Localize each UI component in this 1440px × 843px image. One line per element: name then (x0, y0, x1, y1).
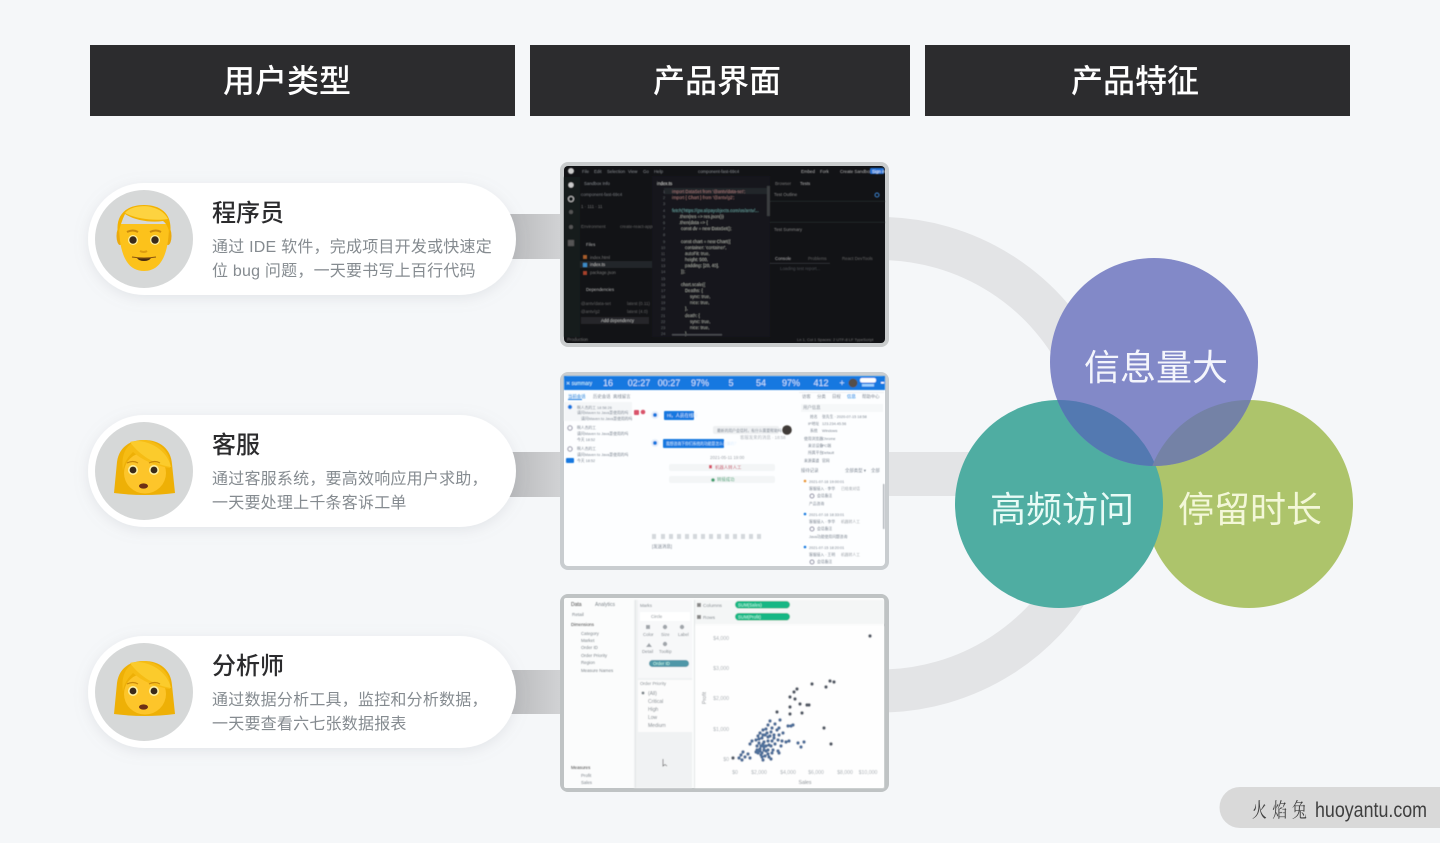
screenshot: customer service console: 帮助中心 (862, 393, 880, 400)
screenshot: data analysis scatter plot: Low (648, 715, 658, 721)
screenshot: customer service console: 会话备注 (817, 526, 832, 531)
screenshot: code editor: 18 (661, 295, 665, 299)
screenshot: customer service console: 16 (603, 378, 613, 388)
header: product interface (530, 45, 910, 116)
screenshot: data analysis scatter plot: Data (571, 602, 582, 608)
screenshot: customer service console: 会话备注 (817, 559, 832, 564)
pill: customer service (88, 415, 516, 527)
title: analyst: 分析师 (212, 653, 284, 680)
screenshot: customer service console: 官网 (822, 458, 830, 463)
screenshot: code editor: index.html (590, 255, 610, 260)
screenshot: code editor: nice: true, (690, 300, 709, 305)
screenshot: customer service console: 啊人杰的工 18:58:26 (577, 405, 612, 410)
screenshot: customer service console: 会话备注 (817, 493, 832, 498)
screenshot: customer service console: 系统 (810, 428, 818, 433)
screenshot: code editor: 16 (661, 283, 665, 287)
avatar: customer service (95, 422, 193, 520)
screenshot: customer service console: Java功能使用问题咨询 (809, 534, 848, 539)
screenshot: code editor: Selection (607, 169, 626, 174)
screenshot: code editor: 15 (661, 277, 665, 281)
screenshot: customer service console: 今天 18:52 (577, 458, 595, 463)
screenshot: data analysis scatter plot: Color (643, 632, 654, 637)
screenshot: data analysis scatter plot: Order Priority (640, 681, 667, 686)
header: product interface: 产品界面 (653, 63, 781, 99)
screenshot: data analysis scatter plot: $10,000 (859, 770, 877, 776)
header: user type: 用户类型 (223, 63, 351, 99)
avatar: analyst (95, 643, 193, 741)
screenshot: code editor: 20 (661, 307, 665, 311)
screenshot: data analysis scatter plot: Measure Names (581, 668, 614, 673)
screenshot: code editor: height: 500, (685, 257, 708, 262)
screenshot: code editor: Deaths: { (685, 288, 703, 293)
screenshot: customer service console: 54 (756, 378, 766, 388)
screenshot: data analysis scatter plot: Detail (642, 649, 653, 654)
screenshot: code editor: Problems (808, 256, 827, 261)
screenshot: data analysis scatter plot: Market (581, 638, 595, 643)
circle: long dwell time (1145, 400, 1353, 608)
screenshot: code editor (560, 162, 889, 347)
screenshot: code editor: Sandbox Info (584, 181, 610, 186)
screenshot: code editor: package.json (590, 270, 616, 275)
screenshot: code editor: Edit (594, 169, 602, 174)
screenshot: customer service console: 2021-07-16 18:33:01 (809, 513, 844, 517)
screenshot: code editor: 11 (661, 252, 665, 256)
screenshot: code editor: import DataSet from '@antv/data-set'; (672, 189, 745, 194)
screenshot: customer service console: 所属平台 (808, 450, 823, 455)
screenshot: data analysis scatter plot: $2,000 (713, 696, 729, 702)
description: analyst: 一天要查看六七张数据报表 (212, 715, 407, 733)
screenshot: code editor: Browser (775, 181, 792, 186)
screenshot: customer service console: 123.234.45.56 (822, 422, 846, 426)
screenshot: customer service console: 请问Maven to Java是使用的吗 (581, 416, 632, 421)
description: programmer: 位 bug 问题，一天要书写上百行代码 (212, 262, 476, 280)
screenshot: code editor: chart.scale({ (681, 282, 706, 287)
screenshot: code editor: }, (685, 331, 688, 336)
screenshot: customer service console: 分类 (817, 393, 826, 400)
screenshot: code editor: 19 (661, 301, 665, 305)
screenshot: code editor: fetch('https://gw.alipayobjects.com/os/antv/... (672, 208, 759, 213)
screenshot: customer service console: 来访设备 (808, 443, 823, 448)
screenshot: code editor: 13 (661, 264, 665, 268)
pill: analyst (88, 636, 516, 748)
screenshot: customer service console: 历史会话 (593, 393, 611, 400)
screenshot: customer service console: 02:27 (628, 378, 650, 388)
screenshot: code editor: File (582, 169, 590, 174)
screenshot: customer service console: [发送消息] (652, 543, 672, 550)
description: analyst (212, 691, 488, 733)
screenshot: customer service console: 客服接入 · 王明 (809, 552, 835, 557)
screenshot: code editor: import { Chart } from '@antv/g2'; (672, 195, 735, 200)
screenshot: data analysis scatter plot: Sales (581, 780, 593, 785)
screenshot: code editor: index.ts (590, 262, 606, 267)
circle: large information volume: 信息量大 (1084, 347, 1228, 388)
screenshot: code editor: Test Summary (774, 227, 803, 232)
screenshot: customer service console: 412 (813, 378, 829, 388)
screenshot: code editor: latest (4.0) (627, 309, 648, 314)
screenshot: customer service console: IP地址 (808, 421, 819, 426)
screenshot: customer service console: 请问Maven to Java是使用的吗 (577, 431, 628, 436)
circle: large information volume (1050, 258, 1258, 466)
screenshot: customer service console: 来源渠道 (804, 458, 819, 463)
screenshot: data analysis scatter plot: Order Priority (581, 653, 608, 658)
screenshot: data analysis scatter plot: Retail (572, 612, 584, 617)
screenshot: code editor: 8 (663, 233, 665, 237)
circle: long dwell time: 停留时长 (1178, 489, 1322, 530)
screenshot: customer service console: 请问Maven to Java是使用的吗 (577, 410, 628, 415)
screenshot: customer service console: + (839, 378, 845, 388)
screenshot: customer service console: 00:27 (658, 378, 680, 388)
screenshot: customer service console: 信息 (847, 393, 856, 400)
screenshot: customer service console (560, 372, 889, 570)
screenshot: code editor: 9 (663, 240, 665, 244)
screenshot: code editor: 14 (661, 270, 665, 274)
screenshot: customer service console: 啊人杰的工 (577, 425, 596, 430)
description: customer service: 一天要处理上千条客诉工单 (212, 494, 407, 512)
screenshot: code editor: Add dependency (601, 318, 635, 323)
screenshot: code editor: 23 (661, 326, 665, 330)
description: customer service: 通过客服系统，要高效响应用户求助， (212, 469, 488, 488)
screenshot: code editor: 12 (661, 258, 665, 262)
screenshot: customer service console: 张先生 · 2020-07-15 18:58 (822, 414, 867, 419)
screenshot: customer service console: 接待记录 (801, 467, 819, 474)
screenshot: customer service console: Hi，人员在线吗 (667, 412, 698, 419)
screenshot: code editor: React DevTools (842, 256, 874, 261)
screenshot: code editor: Tests (800, 181, 811, 186)
screenshot: customer service console: 请问Maven to Java是使用的吗 (577, 452, 628, 457)
screenshot: code editor: Test Outline (774, 192, 798, 197)
screenshot: code editor: Dependencies (586, 287, 615, 292)
header: user type (90, 45, 515, 116)
screenshot: data analysis scatter plot: $0 (723, 757, 729, 763)
screenshot: code editor: View (628, 169, 638, 174)
header: product traits: 产品特征 (1071, 63, 1199, 99)
screenshot: code editor: 4 (663, 209, 665, 213)
screenshot: code editor: Create Sandbox (840, 169, 873, 174)
screenshot: data analysis scatter plot: Size (661, 632, 670, 637)
screenshot: code editor: sync: true, (690, 319, 710, 324)
screenshot: customer service console: 啊人杰的工 (577, 446, 596, 451)
screenshot: data analysis scatter plot: Profit (702, 691, 708, 704)
watermark: 火焰兔 (1252, 799, 1307, 822)
screenshot: code editor: padding: [20, 40], (685, 263, 719, 268)
screenshot: code editor: death: { (685, 313, 700, 318)
screenshot: data analysis scatter plot: Category (581, 631, 600, 636)
screenshot: customer service console: 转接成功 (717, 476, 735, 483)
screenshot: data analysis scatter plot: Marks (640, 603, 653, 608)
screenshot: code editor: Console (775, 256, 792, 261)
screenshot: code editor: autoFit: true, (685, 251, 710, 256)
screenshot: customer service console: 产品咨询 (809, 501, 824, 506)
screenshot: code editor: sync: true, (690, 294, 710, 299)
screenshot: code editor: Environment (581, 224, 606, 229)
screenshot: code editor: @antv/data-set (581, 301, 612, 306)
screenshot: code editor: 3 (663, 202, 665, 206)
screenshot: data analysis scatter plot: $2,000 (751, 770, 767, 776)
screenshot: customer service console: ✕ summary (566, 381, 593, 387)
screenshot: code editor: Go (643, 169, 649, 174)
screenshot: customer service console: 客服接入 · 李华 (809, 486, 835, 491)
screenshot: customer service console: 全部 (871, 467, 880, 474)
column headers (90, 45, 1350, 116)
title: customer service: 客服 (212, 432, 260, 459)
screenshot: code editor: container: 'container', (685, 245, 726, 250)
screenshot: customer service console: 最新的用户会话时，有什么需要帮助吗 (717, 428, 782, 433)
screenshot: customer service console: 2021-07-15 18:20:01 (809, 546, 844, 550)
venn diagram: product traits (955, 258, 1353, 608)
screenshot: code editor: .then(data => { (679, 220, 708, 225)
screenshot: customer service console: 97% (691, 378, 709, 388)
screenshot: code editor: 7 (663, 227, 665, 231)
screenshot: code editor: Sign in (872, 169, 886, 174)
screenshot: code editor: component-fast-69c4 (581, 192, 623, 197)
screenshot: customer service console: 机器人转人工 (715, 464, 742, 471)
screenshot: data analysis scatter plot: SUM(Sales) (738, 602, 762, 608)
avatar: programmer (95, 190, 193, 288)
connector bands (505, 214, 1085, 714)
screenshot: code editor: 5 (663, 215, 665, 219)
screenshot: code editor: Ln 1, Col 1 Spaces: 2 UTF-8 LF TypeScript (797, 337, 874, 342)
screenshot: data analysis scatter plot: Columns (703, 603, 723, 609)
watermark (1220, 787, 1440, 828)
screenshot: code editor: Loading test report... (780, 266, 820, 271)
screenshot: code editor: const chart = new Chart({ (681, 239, 731, 244)
screenshot: customer service console: 机器转人工 (841, 552, 860, 557)
screenshot: customer service console: 我想咨询下你们系统的功能是怎么计算的？ (666, 441, 738, 446)
screenshot: customer service console: 当前会话 (568, 393, 586, 400)
screenshot: data analysis scatter plot: Region (581, 660, 595, 665)
screenshot: code editor: create-react-app (620, 224, 653, 229)
circle: high-frequency visits: 高频访问 (990, 489, 1134, 530)
screenshot: data analysis scatter plot: $0 (732, 770, 738, 776)
screenshot: code editor: 10 (661, 246, 665, 250)
screenshot: data analysis scatter plot: (All) (648, 691, 657, 697)
screenshot: code editor: component-fast-69c4 (698, 169, 740, 174)
screenshot: customer service console: 日程 (832, 393, 841, 400)
header: product traits (925, 45, 1350, 116)
screenshot: data analysis scatter plot: $4,000 (780, 770, 796, 776)
screenshot: data analysis scatter plot: Sales (799, 780, 812, 786)
screenshot: code editor: .then(res => res.json()) (679, 214, 724, 219)
screenshot: code editor: Production (567, 337, 589, 342)
screenshot: data analysis scatter plot (560, 594, 889, 792)
screenshot: customer service console: 用户信息 (803, 404, 821, 411)
screenshot: data analysis scatter plot: Rows (703, 615, 716, 621)
description: analyst: 通过数据分析工具，监控和分析数据， (212, 691, 488, 709)
screenshot: customer service console: 离线留言 (613, 393, 631, 400)
screenshot: code editor: }, (685, 306, 688, 311)
screenshot: code editor: 21 (661, 314, 665, 318)
screenshot: data analysis scatter plot: $1,000 (713, 727, 729, 733)
screenshot: data analysis scatter plot: Dimensions (571, 622, 595, 627)
screenshot: code editor: index.ts (657, 181, 673, 186)
screenshot: code editor: Fork (820, 169, 830, 174)
screenshot: code editor: latest (0.11) (627, 301, 650, 306)
screenshot: customer service console: 机器转人工 (841, 519, 860, 524)
screenshot: customer service console: 2021-05-11 19:00 (710, 455, 745, 460)
title: programmer: 程序员 (212, 200, 284, 227)
pill: programmer (88, 183, 516, 295)
description: customer service (212, 469, 488, 512)
screenshot: code editor: Files (586, 242, 596, 247)
screenshot: code editor: const dv = new DataSet(); (681, 226, 732, 231)
circle: high-frequency visits (955, 400, 1163, 608)
screenshot: data analysis scatter plot: $8,000 (837, 770, 853, 776)
screenshot: data analysis scatter plot: Label (678, 632, 689, 637)
screenshot: customer service console: Windows (822, 429, 838, 433)
description: programmer (212, 238, 492, 280)
screenshot: customer service console: 全部类型 ▾ (845, 467, 866, 474)
screenshot: customer service console: 今天 18:52 (577, 437, 595, 442)
screenshot: data analysis scatter plot: Measures (571, 765, 591, 770)
screenshot: customer service console: 访客 (802, 393, 811, 400)
screenshot: code editor: }); (681, 269, 685, 274)
screenshot: customer service console: 客服发来的消息 · 18:58 (740, 434, 786, 441)
screenshot: code editor: 1 · 111 · 11 (581, 204, 603, 209)
screenshot: customer service console: 客服接入 · 李华 (809, 519, 835, 524)
screenshot: data analysis scatter plot: Critical (648, 699, 663, 705)
screenshot: code editor: 2 (663, 196, 665, 200)
screenshot: customer service console: Default (822, 451, 835, 455)
screenshot: data analysis scatter plot: $3,000 (713, 666, 729, 672)
description: programmer: 通过 IDE 软件，完成项目开发或快速定 (212, 238, 492, 256)
screenshot: code editor: 22 (661, 320, 665, 324)
screenshot: code editor: 24 (661, 332, 665, 336)
screenshot: data analysis scatter plot: Order ID (653, 661, 670, 666)
screenshot: customer service console: 使用浏览器 (804, 436, 823, 441)
screenshot: data analysis scatter plot: $6,000 (808, 770, 824, 776)
screenshot: customer service console: Chrome (822, 437, 836, 441)
screenshot: customer service console: 5 (728, 378, 734, 388)
screenshot: code editor: 6 (663, 221, 665, 225)
screenshot: data analysis scatter plot: $4,000 (713, 636, 729, 642)
screenshot: code editor: 17 (661, 289, 665, 293)
screenshot: code editor: @antv/g2 (581, 309, 600, 314)
screenshot: customer service console: PC端 (822, 443, 831, 448)
screenshot: customer service console: 97% (782, 378, 800, 388)
screenshot: data analysis scatter plot: Order ID (581, 645, 598, 650)
screenshot: code editor: nice: true, (690, 325, 709, 330)
screenshot: data analysis scatter plot: Analytics (595, 602, 616, 608)
screenshot: data analysis scatter plot: Circle (651, 614, 663, 619)
screenshot: customer service console: 已结束对话 (841, 486, 860, 491)
screenshot: customer service console: 2021-07-16 19:00:01 (809, 480, 844, 484)
screenshot: data analysis scatter plot: SUM(Profit) (738, 614, 761, 620)
screenshot: data analysis scatter plot: Medium (648, 723, 666, 729)
screenshot: code editor: Embed (801, 169, 815, 174)
screenshot: customer service console: 姓名 (810, 414, 818, 419)
screenshot: data analysis scatter plot: Tooltip (659, 649, 672, 654)
screenshot: data analysis scatter plot: Profit (581, 773, 592, 778)
screenshot: code editor: Help (654, 169, 664, 174)
screenshot: data analysis scatter plot: High (648, 707, 659, 713)
screenshot: code editor: 1 (663, 190, 665, 194)
